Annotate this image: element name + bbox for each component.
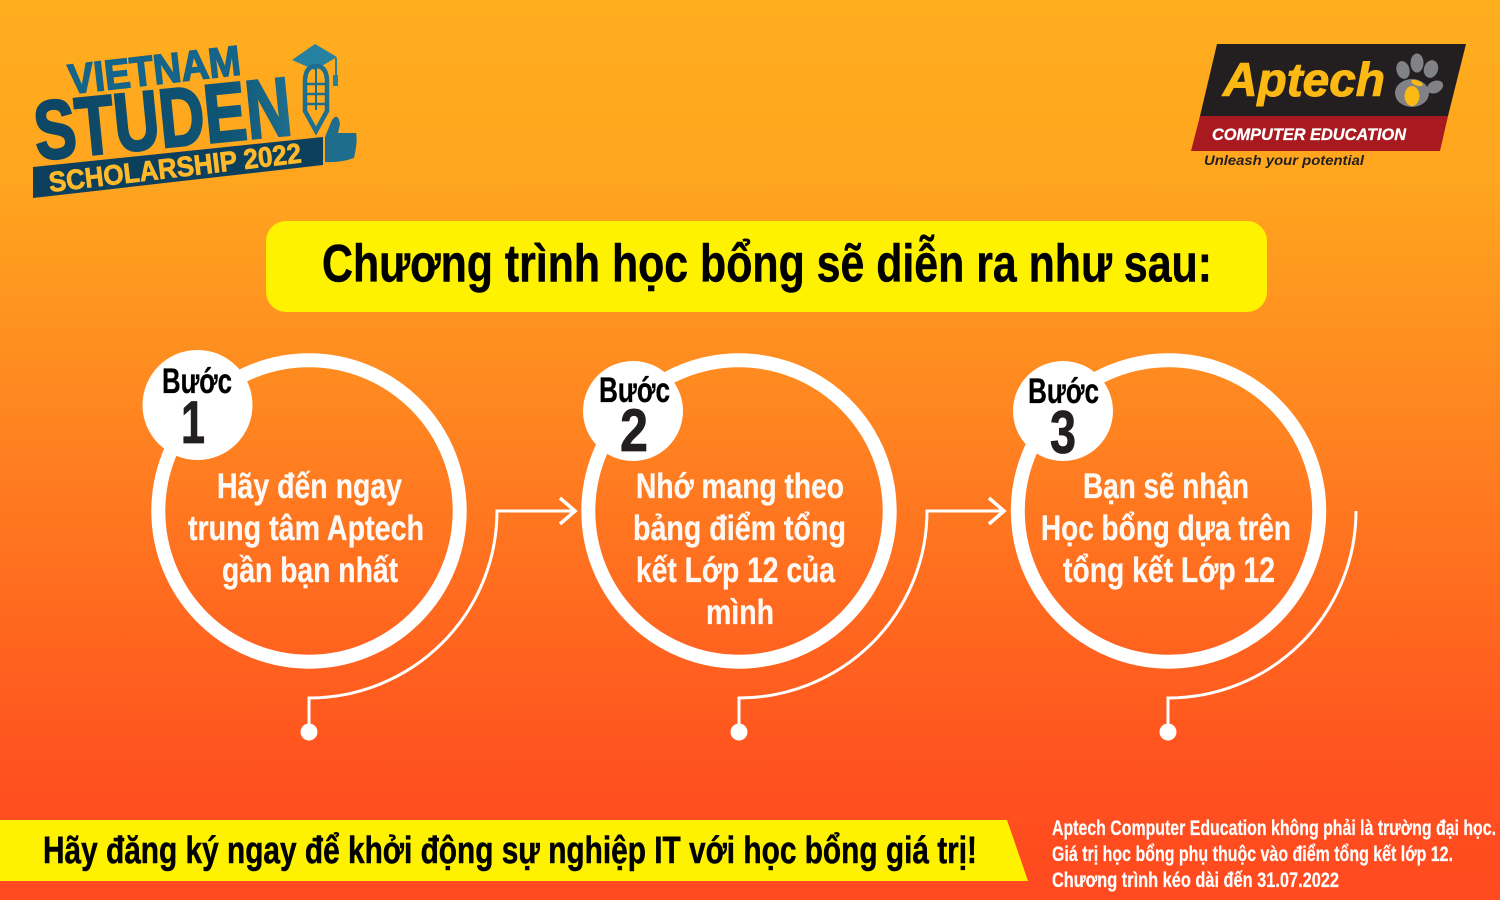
step 1 text: gần bạn nhất: [222, 551, 398, 590]
step 2 text: mình: [706, 593, 774, 632]
logo: Aptech: [1191, 44, 1466, 168]
step 2 text: bảng điểm tổng: [633, 509, 846, 548]
logo banner: [33, 137, 323, 198]
step 2 badge: 2: [620, 397, 648, 464]
step 1 text: [188, 467, 424, 590]
logo word: STUDEN: STUDEN: [30, 60, 296, 178]
footnote: Chương trình kéo dài đến 31.07.2022: [1052, 869, 1339, 892]
icon: graduation cap: [292, 44, 338, 86]
title: Chương trình học bổng sẽ diễn ra như sau:: [322, 234, 1212, 294]
step 3 text: tổng kết Lớp 12: [1063, 551, 1275, 590]
step 2 badge: [583, 361, 683, 464]
step 3 text: [1041, 467, 1291, 590]
step 1: [142, 350, 576, 740]
step 1 badge: Bước: [162, 362, 232, 401]
logo black panel: [1200, 44, 1466, 116]
step 2 ring: [588, 360, 890, 662]
step 1 badge: [142, 350, 252, 460]
logo word: VIETNAM: VIETNAM: [66, 37, 243, 103]
icon: paw: [1394, 54, 1445, 107]
step 2 badge: Bước: [599, 371, 670, 410]
logo word: Aptech: Aptech: [1222, 53, 1385, 106]
logo word: SCHOLARSHIP 2022: SCHOLARSHIP 2022: [47, 138, 303, 198]
step 2 text: [633, 467, 846, 632]
step 3 badge: 3: [1050, 399, 1076, 466]
logo: Vietnam Student Scholarship 2022: [30, 37, 357, 198]
footnote: [1052, 817, 1496, 892]
step 1 badge: 1: [181, 389, 205, 456]
logo red panel: [1191, 116, 1448, 151]
step 3 text: Học bổng dựa trên: [1041, 509, 1291, 548]
call-to-action text: Hãy đăng ký ngay để khởi động sự nghiệp IT với học bổng giá trị!: [43, 830, 977, 872]
step 2 connector arrow: [730, 498, 1005, 740]
step 3 text: Bạn sẽ nhận: [1083, 467, 1249, 506]
logo tagline: Unleash your potential: [1204, 152, 1365, 168]
step 3: [1013, 360, 1356, 740]
step 3 ring: [1018, 360, 1319, 662]
step 1 ring: [158, 360, 460, 662]
step 1 text: trung tâm Aptech: [188, 509, 424, 548]
title banner: [266, 221, 1267, 312]
step 3 badge: [1013, 361, 1113, 466]
step 2 text: Nhớ mang theo: [636, 467, 844, 506]
step 3 connector: [1160, 511, 1356, 740]
step 3 badge: Bước: [1028, 372, 1099, 411]
icon: pencil: [305, 66, 327, 131]
step 2: [583, 360, 1005, 740]
step 1 text: Hãy đến ngay: [217, 467, 402, 506]
bottom call-to-action banner: [0, 820, 1028, 881]
step 2 text: kết Lớp 12 của: [636, 551, 835, 590]
logo text: COMPUTER EDUCATION: COMPUTER EDUCATION: [1212, 125, 1407, 144]
icon: thumbs up: [325, 117, 357, 162]
step 1 connector arrow: [300, 498, 576, 740]
